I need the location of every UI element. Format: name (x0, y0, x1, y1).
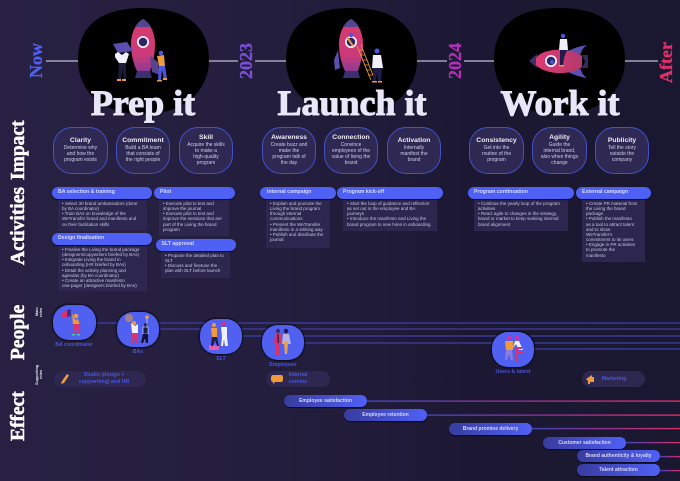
impact card: Connection (324, 127, 378, 174)
activity text: External campaign details: package (586, 211, 603, 216)
effect bar: Employee retention: Employee retention (362, 412, 409, 418)
timeline label: 2023: 2023 (236, 44, 256, 80)
section label: Effect: Effect (8, 391, 29, 441)
activity text: Design finalisation details (58, 245, 147, 291)
impact card: Awareness: the day (281, 160, 297, 166)
activity text: BA selection details (58, 199, 147, 231)
section label: People: People (8, 305, 29, 360)
impact card: Connection: value of living the (332, 154, 370, 160)
impact card: Activation (387, 127, 441, 174)
activity text: Program continuation details: • React agile to changes in the strategy, (478, 211, 557, 216)
people tile: Users & talent (492, 332, 534, 367)
supporting role: Studio and HR: Studio (design + (84, 372, 124, 378)
supporting role: Internal comms (266, 371, 330, 387)
supporting role: Internal comms: Internal (289, 372, 307, 378)
activity text: Design finalisation details: • Create an attractive manifesto (62, 278, 125, 283)
impact card: Commitment (116, 127, 170, 174)
icon: rocket on launch pad (113, 19, 167, 82)
section label: Impact: Impact (8, 120, 29, 180)
impact card: Skill: Skill (199, 134, 213, 141)
activity text: Program kick-off details: • Introduce the manifesto and Living the (347, 216, 426, 221)
activity header: Program continuation (468, 187, 574, 198)
activity text: Internal campaign details: manifesto in a striking way (270, 227, 323, 232)
effect bar: Talent attraction (577, 464, 660, 476)
activity text: Pilot details: program (163, 227, 180, 232)
activity header: Pilot: Pilot (160, 189, 171, 195)
impact card: Clarity: and how the (67, 151, 94, 157)
effect bar: Customer satisfaction (543, 436, 626, 448)
impact card: Commitment: Build a BA team (125, 145, 161, 151)
activity text: BA selection details: on their facilitation skills (62, 222, 109, 227)
icon: pencil (61, 374, 69, 384)
activity text: Internal campaign details: • Present the WeTransfer (270, 222, 320, 227)
impact card: Consistency: routine of the (482, 151, 511, 157)
activity text: External campaign details (582, 199, 645, 262)
heading: Prep it: Prep it (91, 83, 195, 123)
activity text: Program continuation details (474, 199, 568, 231)
icon: megaphone (586, 375, 594, 384)
activity text: Program kick-off details (343, 199, 437, 231)
activity header: Program kick-off (337, 187, 443, 198)
activity text: Design finalisation details: • Detail the activity planning and (62, 268, 126, 273)
timeline label: 2024: 2024 (445, 44, 465, 80)
impact card: Awareness: make the (279, 148, 299, 154)
role label: Main roles: Main (35, 308, 39, 316)
activity text: Design finalisation details: • Integrate Living the brand in (62, 257, 121, 262)
activity header: SLT approval: SLT approval (162, 241, 194, 247)
activity text: Pilot details (159, 199, 229, 236)
activity header: Internal campaign: Internal campaign (267, 189, 311, 195)
role label: Main roles (35, 307, 43, 317)
activity header: BA selection & training: BA selection & training (58, 189, 115, 195)
activity text: Pilot details: improve the sessions that are (163, 216, 222, 221)
activity header: Pilot (154, 187, 235, 198)
people caption: BAs: BAs (133, 349, 143, 355)
activity text: SLT approval details: • Propose the detailed plan to (165, 253, 224, 258)
icon: rocket with ladder (334, 19, 383, 82)
impact card: Agility: internal brand, (544, 148, 575, 154)
impact card: Skill: Acquire the skills (187, 142, 225, 148)
activity text: Pilot details: • Execute pilot to test and (163, 201, 214, 206)
activity header: Internal campaign (260, 187, 336, 198)
activity text: Design finalisation details: onboarding (HR briefed by BAs) (62, 262, 126, 267)
activity text: Program continuation details: activities (478, 206, 495, 211)
activity header: BA selection & training (52, 187, 152, 198)
effect bar: Customer satisfaction: Customer satisfaction (558, 440, 611, 446)
blob: launch it illustration (286, 8, 417, 114)
impact card: Publicity (595, 127, 649, 174)
impact card: Clarity: Determine why (64, 145, 97, 151)
activity text: SLT approval details: SLT (165, 258, 173, 263)
supporting role: Studio and HR (54, 371, 146, 387)
effect bar: Brand promise delivery: Brand promise delivery (463, 426, 518, 432)
activity text: Internal campaign details: through internal (270, 211, 301, 216)
impact card: Connection: Convince (341, 142, 361, 148)
impact card: Publicity: Publicity (608, 137, 636, 144)
supporting role: Marketing: Marketing (602, 376, 626, 382)
activity text: BA selection details: • Train BAs on knowledge of the (62, 211, 126, 216)
activity header: External campaign: External campaign (582, 189, 628, 195)
activity text: External campaign details: the Living the brand (586, 206, 626, 211)
effect bar: Brand authenticity & loyalty (577, 450, 660, 462)
activity text: Internal campaign details (266, 199, 330, 248)
activity header: Design finalisation: Design finalisation (58, 235, 104, 241)
impact card: Skill: to make a (195, 148, 217, 154)
impact card: Clarity: Clarity (70, 137, 91, 144)
impact card: Commitment: Commitment (122, 137, 164, 144)
impact card: Consistency (469, 127, 524, 174)
supporting role: Internal comms: comms (289, 379, 307, 385)
activity text: External campaign details: as a tool to attract talent (586, 222, 634, 227)
effect bar: Employee retention (344, 409, 427, 421)
activity text: External campaign details: • Create PR material from (586, 201, 637, 206)
activity text: Internal campaign details: • Publish and distribute the (270, 232, 323, 237)
impact card: Consistency: program (487, 157, 506, 163)
impact card: Activation: Internally (404, 145, 424, 151)
impact card: Consistency: Get into the (484, 145, 509, 151)
blob: prep it illustration (78, 8, 209, 114)
activity text: Design finalisation details: (designers/copywriters briefed by BAs) (62, 252, 139, 257)
effect bar: Brand authenticity & loyalty: Brand authenticity & loyalty (585, 453, 652, 459)
people tile: Employees (262, 325, 304, 360)
effect bar: Employee satisfaction: Employee satisfaction (299, 398, 352, 404)
impact card: Awareness: program talk of (272, 154, 306, 160)
people caption: BA coordinator: BA coordinator (55, 342, 93, 348)
activity text: Design finalisation details: agendas (by BA coordinator) (62, 273, 119, 278)
activity text: Program continuation details: brand or market to keep seeking internal (478, 216, 559, 221)
impact card: Clarity (53, 127, 108, 174)
people tile: BAs (117, 312, 159, 347)
impact card: Publicity: Tell the story (608, 145, 636, 151)
impact card: Publicity: company (612, 157, 632, 163)
impact card: Activation: manifest the (400, 151, 428, 157)
impact card: Publicity: outside the (610, 151, 634, 157)
activity text: BA selection details: • Select 30 brand ambassadors (done (62, 201, 137, 206)
activity text: Design finalisation details: one-pager (designers briefed by BAs) (62, 283, 137, 288)
effect bar: Talent attraction: Talent attraction (599, 467, 638, 473)
activity header: Design finalisation (52, 233, 152, 244)
activity text: External campaign details: • Engage in PR activities (586, 242, 635, 247)
activity text: SLT approval details: plan with SLT before launch (165, 268, 220, 273)
activity header: SLT approval (156, 239, 236, 250)
people caption: SLT: SLT (216, 356, 226, 362)
activity text: Program continuation details: • Continue the yearly loop of the program (478, 201, 560, 206)
supporting role: Studio and HR: copywriting) and HR (79, 379, 129, 385)
supporting role: Marketing (582, 371, 645, 387)
activity text: Pilot details: improve the journal (163, 206, 201, 211)
activity text: SLT approval details (161, 251, 230, 278)
activity text: Pilot details: part of the Living the brand (163, 222, 217, 227)
activity text: Program kick-off details: brand program to new hires in onboarding (347, 222, 431, 227)
role label: Supporting roles: Supporting (35, 364, 39, 385)
activity header: Program kick-off: Program kick-off (343, 189, 384, 195)
effect bar: Brand promise delivery (449, 422, 532, 434)
activity text: Program continuation details: brand alignment (478, 222, 510, 227)
role label: Supporting roles: roles (39, 370, 43, 379)
activity text: External campaign details: • Publish the manifesto (586, 216, 632, 221)
impact card: Awareness: Create buzz and (271, 142, 307, 148)
timeline label: Now: Now (26, 44, 46, 78)
activity text: Program kick-off details: • Start the loop of guidance and reflection (347, 201, 429, 206)
activity text: External campaign details: and to show (586, 227, 610, 232)
activity text: BA selection details: WeTransfer brand and manifesto and (62, 216, 136, 221)
impact card: Awareness (262, 127, 316, 174)
activity text: Internal campaign details: Living the brand program (270, 206, 320, 211)
impact card: Commitment: that consists of (126, 151, 160, 157)
activity text: Program kick-off details: journeys (347, 211, 364, 216)
icon: speech bubble (271, 375, 283, 384)
activity text: External campaign details: manifesto (586, 253, 606, 258)
impact card: Agility: Guide the (549, 142, 570, 148)
activity text: Internal campaign details: journal (270, 237, 284, 242)
impact card: Skill: high-quality (193, 154, 219, 160)
impact card: Agility (532, 127, 587, 174)
impact card: Connection: brand (345, 160, 357, 166)
heading: Work it: Work it (500, 83, 620, 123)
impact card: Connection: Connection (332, 134, 370, 141)
impact card: Skill: program (197, 160, 215, 166)
activity text: Pilot details: • Execute pilot to test and (163, 211, 214, 216)
activity text: External campaign details: commitment to its users (586, 237, 634, 242)
people tile: BA coordinator (53, 305, 96, 340)
section label: Activities: Activities (8, 187, 29, 265)
impact card: Agility: also when things (541, 154, 578, 160)
icon: rocket in flight with rider (529, 34, 588, 78)
impact card: Consistency: Consistency (476, 137, 517, 144)
impact card: Agility: change (551, 160, 568, 166)
activity header: Program continuation: Program continuation (474, 189, 528, 195)
activity text: External campaign details: WeTransfer's (586, 232, 612, 237)
activity text: Internal campaign details: communications (270, 216, 303, 221)
impact card: Skill (179, 127, 233, 174)
activity text: External campaign details: to promote the (586, 247, 615, 252)
effect bar: Employee satisfaction (284, 395, 367, 407)
activity text: Internal campaign details: • Explain and promote the (270, 201, 322, 206)
people caption: Employees: Employees (269, 362, 297, 368)
timeline label: After: After (656, 42, 676, 83)
role label: Main roles: roles (39, 307, 43, 317)
impact card: Activation: Activation (398, 137, 430, 144)
impact card: Awareness: Awareness (271, 134, 307, 141)
impact card: Agility: Agility (549, 134, 570, 141)
activity text: Design finalisation details: • Finalise the Living the brand package (62, 247, 139, 252)
impact card: Clarity: program exists (64, 157, 97, 163)
impact card: Connection: employees of the (332, 148, 370, 154)
heading: Launch it: Launch it (277, 83, 427, 123)
activity text: Program kick-off details: as set out in the employee and BA (347, 206, 416, 211)
people caption: Users & talent: Users & talent (496, 369, 530, 375)
impact card: Activation: brand (408, 157, 420, 163)
activity header: External campaign (576, 187, 651, 198)
activity text: SLT approval details: • Discuss and finetune the (165, 263, 217, 268)
activity text: BA selection details: by BA coordinator) (62, 206, 99, 211)
blob: work it illustration (494, 8, 625, 114)
impact card: Commitment: the right people (126, 157, 160, 163)
people tile: SLT (200, 319, 242, 354)
role label: Supporting roles (35, 364, 43, 385)
